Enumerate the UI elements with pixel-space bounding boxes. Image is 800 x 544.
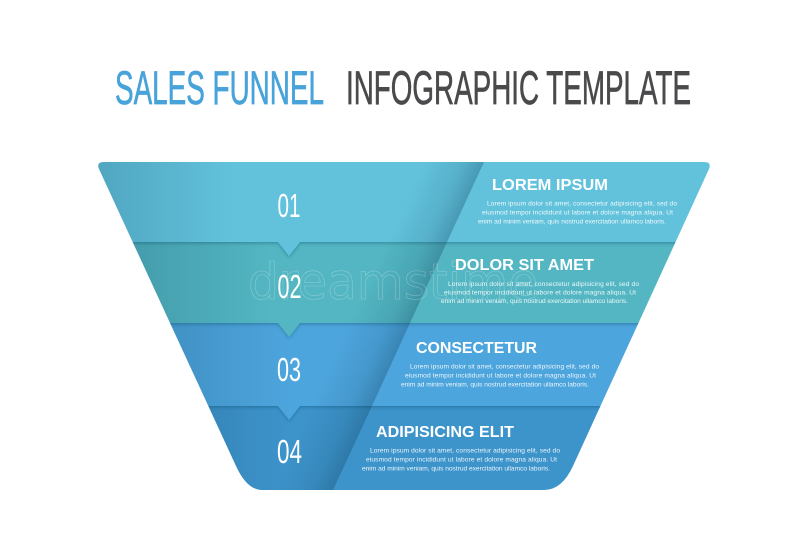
watermark: dreamstime (248, 253, 538, 311)
number 04: 04 (277, 433, 302, 470)
heading: adipisicing elit: ADIPISICING ELIT (376, 424, 514, 441)
title: sales funnel: SALES FUNNEL (115, 61, 324, 114)
body text: row 03: Lorem ipsum dolor sit amet, consectetur adipisicing elit, sed do (410, 364, 599, 370)
text block: row 02 (441, 257, 639, 305)
body text: row 03 (401, 364, 599, 388)
body text: row 01: Lorem ipsum dolor sit amet, consectetur adipisicing elit, sed do (487, 200, 677, 208)
number 03: 03 (277, 351, 301, 388)
body text: row 02 (441, 281, 639, 305)
panel: row 03 (170, 323, 638, 422)
panel: row 02 (132, 242, 676, 338)
funnel (90, 162, 720, 496)
body text: row 03: enim ad minim veniam, quis nostrud exercitation ullamco laboris. (401, 382, 589, 388)
body text: row 04 (362, 448, 560, 472)
text block: row 03 (401, 340, 599, 388)
number 02: 02 (278, 268, 302, 305)
body text: row 02: Lorem ipsum dolor sit amet, consectetur adipisicing elit, sed do (448, 281, 639, 288)
body text: row 04: Lorem ipsum dolor sit amet, consectetur adipisicing elit, sed do (370, 448, 560, 454)
body text: row 04: eiusmod tempor incididunt ut labore et dolore magna aliqua. Ut (366, 456, 557, 464)
heading: lorem ipsum: LOREM IPSUM (492, 177, 608, 194)
body text: row 02: eiusmod tempor incididunt ut labore et dolore magna aliqua. Ut (444, 290, 636, 296)
heading: consectetur: CONSECTETUR (416, 340, 537, 357)
body text: row 03: eiusmod tempor incididunt ut labore et dolore magna aliqua. Ut (405, 372, 596, 380)
heading: dolor sit amet: DOLOR SIT AMET (455, 257, 594, 274)
body text: row 01 (478, 200, 677, 226)
text block: row 01 (478, 177, 677, 226)
panel: row 01 (90, 162, 720, 256)
panel: row 04 (208, 406, 600, 490)
body text: row 01: enim ad minim veniam, quis nostrud exercitation ullamco laboris. (478, 218, 666, 226)
title (115, 61, 691, 114)
body text: row 02: enim ad minim veniam, quis nostrud exercitation ullamco laboris. (441, 298, 628, 305)
body text: row 04: enim ad minim veniam, quis nostrud exercitation ullamco laboris. (362, 466, 550, 472)
number 01: 01 (278, 187, 300, 224)
body text: row 01: eiusmod tempor incididunt ut labore et dolore magna aliqua. Ut (482, 210, 673, 216)
text block: row 04 (362, 424, 560, 472)
